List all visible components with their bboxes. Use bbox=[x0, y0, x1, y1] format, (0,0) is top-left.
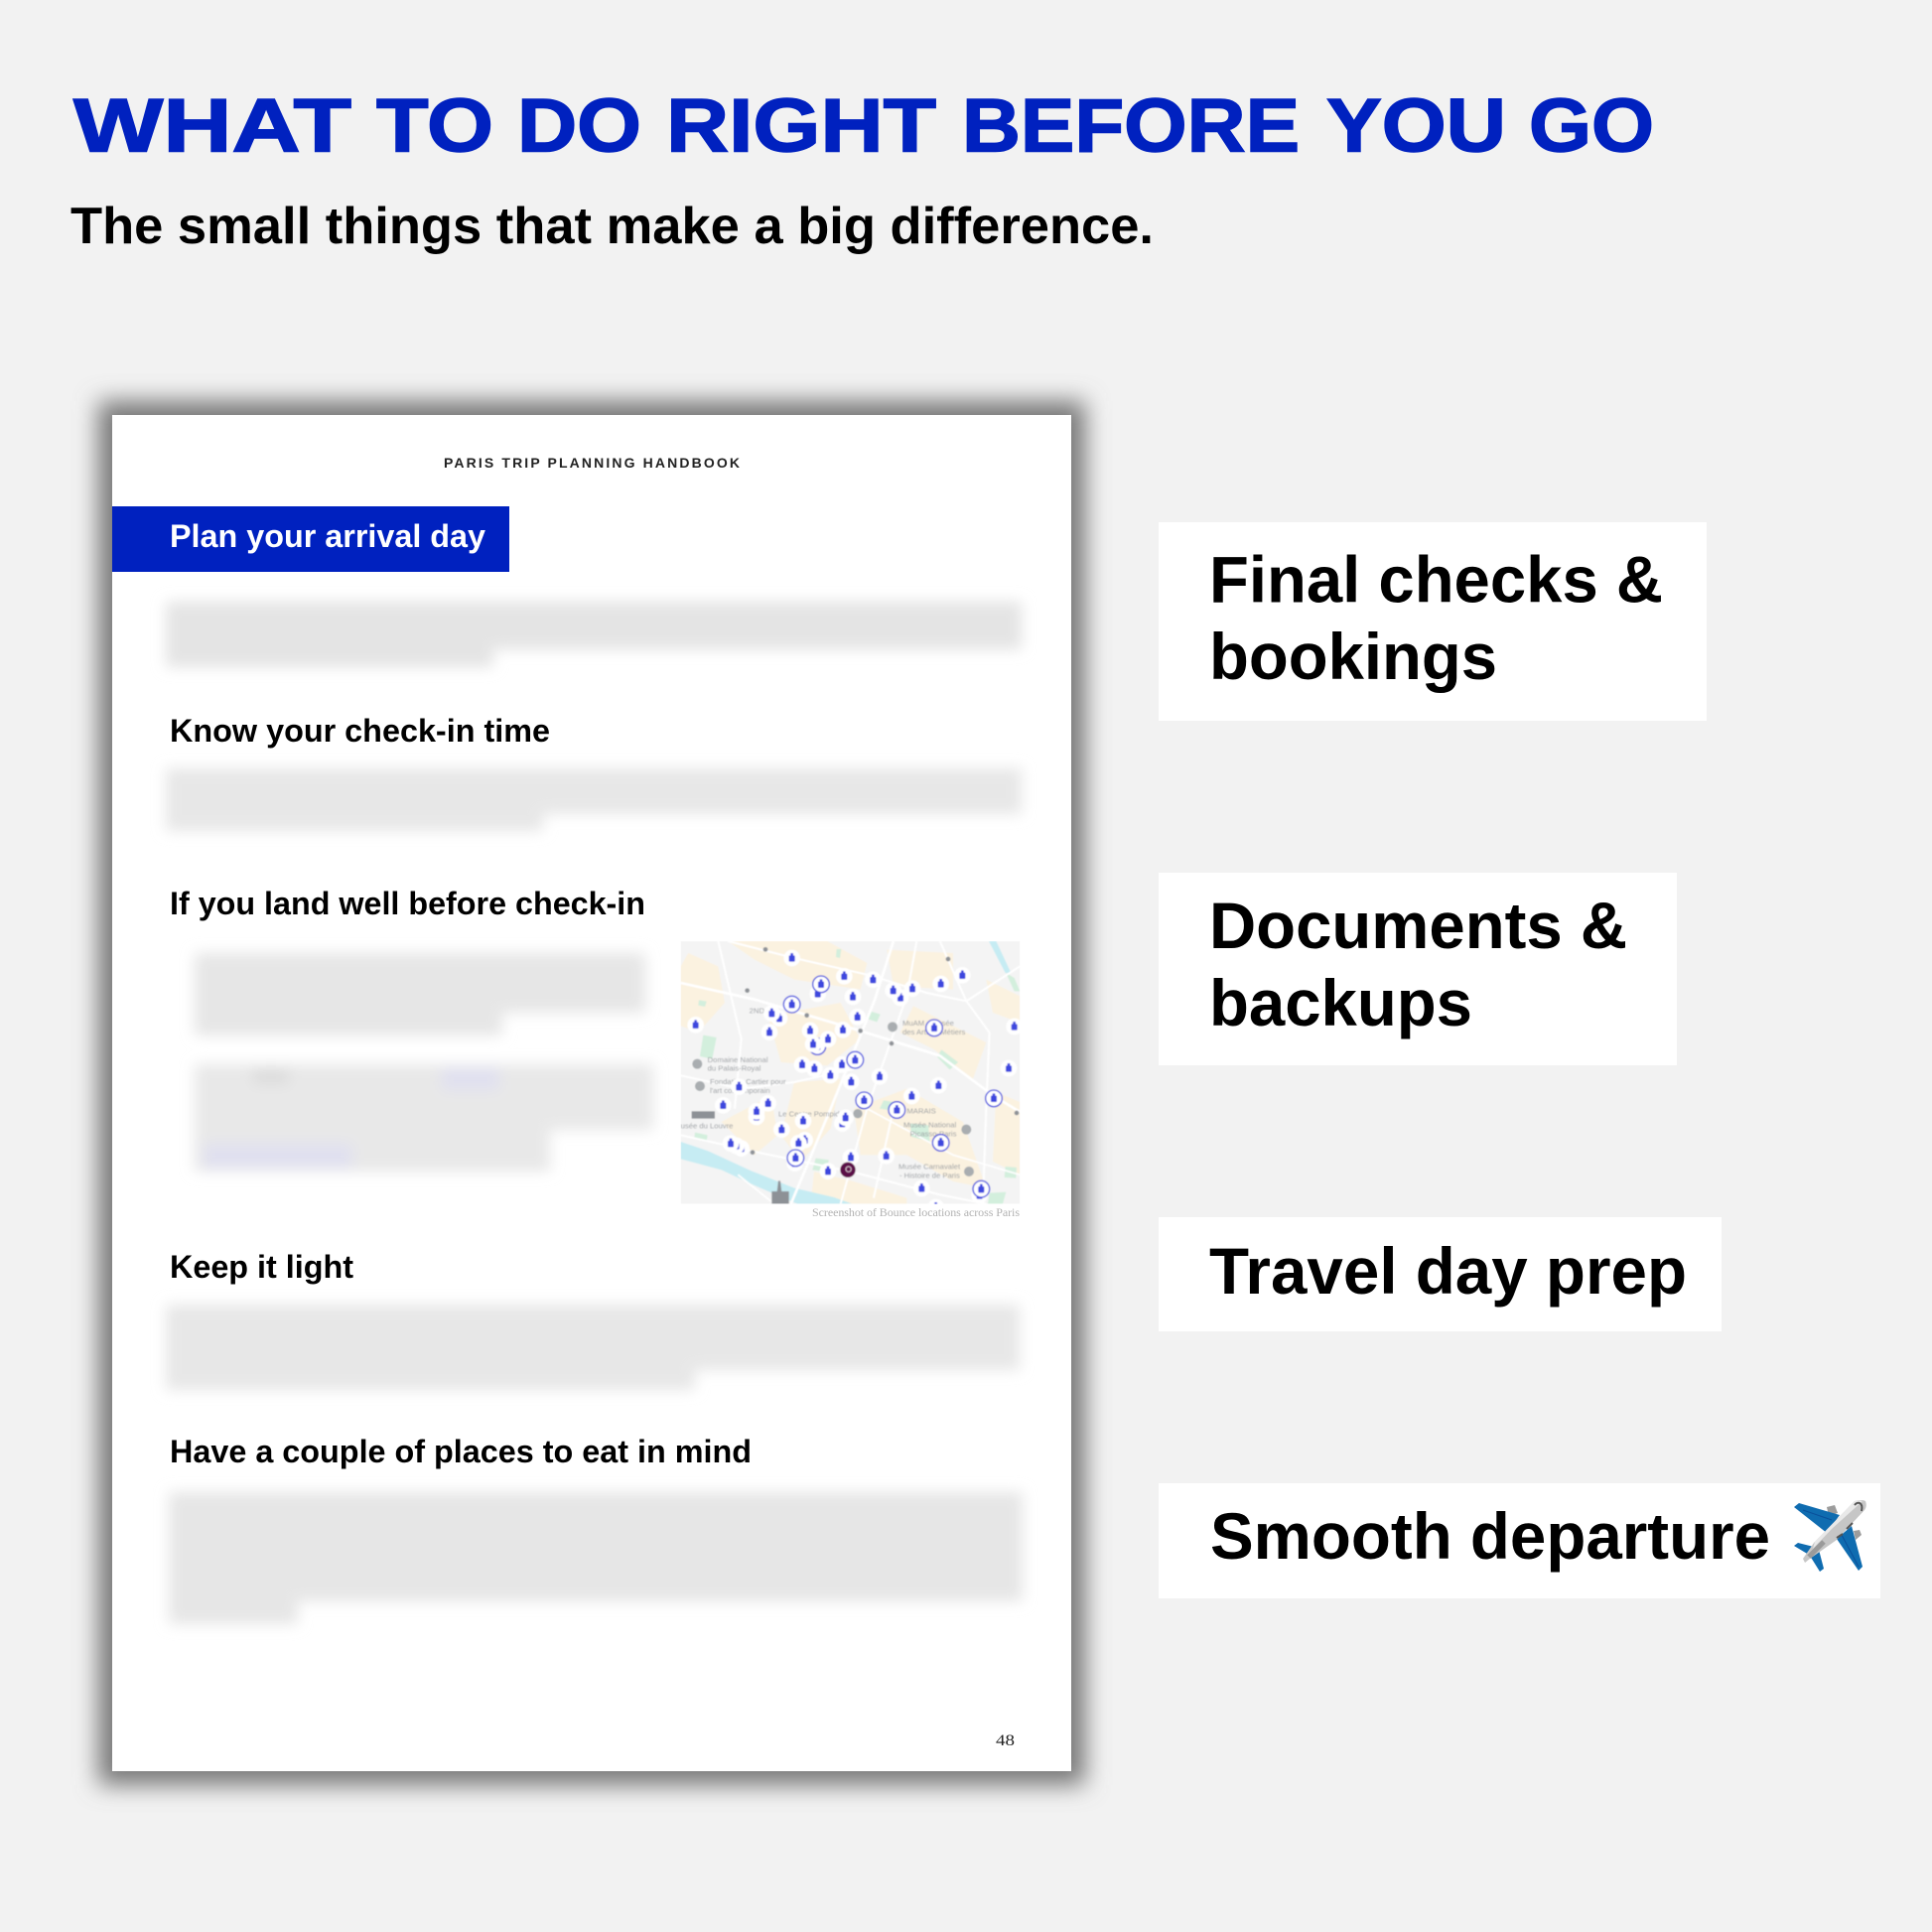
map districts bbox=[681, 941, 1020, 1204]
title bbox=[73, 83, 1654, 169]
page sheet bbox=[112, 415, 1071, 1771]
callout: documents and backups bbox=[1159, 873, 1677, 1065]
map labels: usée du Louvre bbox=[681, 1122, 733, 1131]
map labels: Fondation Cartier pour bbox=[710, 1077, 786, 1086]
panel: handbook page bbox=[98, 401, 1085, 1785]
icon: airplane bbox=[1794, 1500, 1866, 1572]
callout: travel day prep: Travel day prep bbox=[1209, 1234, 1687, 1308]
heading: if you land well before check-in: If you land well before check-in bbox=[170, 886, 645, 921]
page number: 48 bbox=[996, 1732, 1015, 1749]
map labels: - Histoire de Paris bbox=[899, 1171, 960, 1179]
blurred paragraph 1 bbox=[166, 602, 1022, 667]
callout: final checks and bookings bbox=[1159, 522, 1707, 721]
section banner: plan your arrival day bbox=[112, 506, 509, 572]
map labels: Domaine National bbox=[708, 1055, 768, 1064]
map labels: Musée National bbox=[903, 1121, 956, 1130]
map pins bbox=[687, 950, 1023, 1215]
heading: have a couple of places to eat in mind: Have a couple of places to eat in mind bbox=[170, 1434, 752, 1469]
map labels: des Arts et Métiers bbox=[902, 1028, 966, 1036]
callout: smooth departure bbox=[1159, 1483, 1880, 1598]
map parks bbox=[694, 949, 1020, 1204]
map labels bbox=[681, 1006, 966, 1179]
map labels: Le Centre Pompidou bbox=[778, 1109, 848, 1118]
heading: know your check-in time: Know your check-in time bbox=[170, 713, 550, 749]
map landmarks bbox=[692, 947, 1019, 1204]
title: BEFORE bbox=[962, 83, 1300, 169]
blurred paragraph 2 bbox=[166, 768, 1022, 831]
map roads bbox=[681, 941, 1020, 1204]
title: DO bbox=[517, 83, 641, 169]
page running header: PARIS TRIP PLANNING HANDBOOK bbox=[444, 455, 740, 471]
title: TO bbox=[376, 83, 493, 169]
map labels: Picasso-Paris bbox=[910, 1130, 957, 1139]
subtitle: The small things that make a big difference. bbox=[70, 198, 1154, 255]
blurred paragraph 3 bbox=[166, 1305, 1020, 1390]
title: WHAT bbox=[73, 83, 351, 169]
callout: documents and backups: backups bbox=[1209, 966, 1472, 1039]
callout: final checks and bookings: bookings bbox=[1209, 620, 1497, 693]
map base bbox=[681, 941, 1020, 1204]
callout: documents and backups: Documents & bbox=[1209, 889, 1627, 962]
heading: keep it light: Keep it light bbox=[170, 1249, 353, 1285]
title: GO bbox=[1529, 83, 1654, 169]
section banner: plan your arrival day: Plan your arrival day bbox=[170, 518, 485, 554]
callout: smooth departure: Smooth departure bbox=[1210, 1499, 1770, 1573]
blurred bullet list bbox=[195, 953, 653, 1172]
blurred paragraph 4 bbox=[169, 1492, 1023, 1624]
callout: final checks and bookings: Final checks & bbox=[1209, 542, 1663, 616]
map caption: Screenshot of Bounce locations across Paris bbox=[812, 1205, 1020, 1219]
callout: travel day prep bbox=[1159, 1217, 1722, 1331]
map screenshot bbox=[681, 941, 1023, 1215]
title: YOU bbox=[1326, 83, 1506, 169]
map labels: MuAM - Musée bbox=[902, 1019, 954, 1028]
map labels: l'art contemporain bbox=[710, 1086, 770, 1095]
map labels: du Palais-Royal bbox=[708, 1064, 761, 1073]
map labels: 2ND bbox=[750, 1006, 764, 1015]
map river bbox=[681, 1142, 852, 1204]
map labels: Musée Carnavalet bbox=[898, 1162, 961, 1171]
map labels: MARAIS bbox=[906, 1106, 936, 1115]
page shadow bbox=[98, 401, 1085, 1785]
title: RIGHT bbox=[666, 83, 936, 169]
